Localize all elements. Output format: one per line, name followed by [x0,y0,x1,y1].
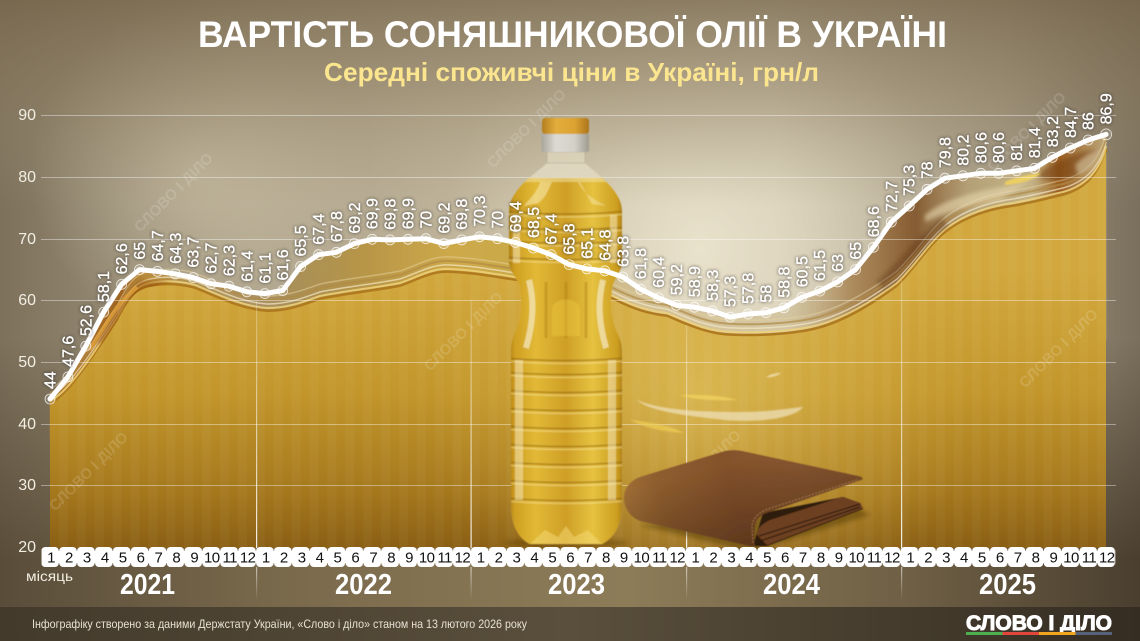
month axis: 5 [763,550,771,566]
data value labels: 69,9 [400,198,418,229]
data value labels: 58,1 [96,271,113,302]
data value labels: 58,3 [705,270,722,301]
month axis: 10 [204,550,220,566]
watermarks: СЛОВО І ДІЛО [421,289,507,375]
data value labels: 80,2 [955,135,972,166]
data value labels: 63,7 [186,236,203,268]
data value labels: 58 [758,285,776,303]
y axis labels: 60 [18,292,36,309]
year labels: 2021 [120,569,175,601]
data value labels: 86,9 [1099,93,1116,124]
watermarks: СЛОВО І ДІЛО [46,429,132,515]
month axis: 6 [996,550,1004,566]
month axis: 12 [1099,550,1115,566]
month axis [42,547,1116,567]
data value labels: 67,4 [311,213,328,245]
month axis: 3 [298,550,306,566]
data value labels: 61,6 [275,249,292,280]
footer band [0,607,1140,641]
month axis: 7 [799,550,807,566]
data value labels: 84,7 [1063,107,1080,138]
title: ВАРТІСТЬ СОНЯШНИКОВОЇ ОЛІЇ В УКРАЇНІ [198,14,947,55]
data value labels: 57,3 [723,276,740,307]
month axis: 9 [835,550,843,566]
data value labels: 60,4 [651,257,668,288]
data value labels: 63 [830,254,847,272]
data value labels: 68,5 [526,207,543,238]
data value labels: 86 [1081,112,1098,130]
data value labels: 61,1 [257,252,274,284]
data value labels: 58,8 [776,267,793,298]
month axis: 1 [262,550,270,566]
data value labels: 69,8 [454,199,471,230]
data value labels: 75,3 [902,165,919,196]
data value labels: 64,7 [150,230,167,261]
data value labels: 44 [42,371,60,389]
month axis: 11 [652,550,667,566]
month axis: 2 [924,550,932,566]
month axis: 3 [513,550,521,566]
data value labels: 69,9 [365,198,382,229]
month axis: 9 [620,550,628,566]
month axis: 8 [817,550,825,566]
month axis: 2 [495,550,503,566]
data value labels: 69,2 [436,202,453,234]
data value labels: 67,4 [544,213,561,245]
y axis labels: 30 [18,477,36,494]
month axis: 1 [47,550,55,566]
data value labels: 65,5 [293,225,310,256]
data value labels: 69,8 [383,199,400,230]
month axis: 4 [316,550,324,566]
data value labels: 80,6 [973,132,990,163]
month axis: 5 [119,550,127,566]
month axis: 1 [906,550,914,566]
month axis caption: місяць [26,569,73,584]
month axis: 8 [1032,550,1040,566]
month axis: 12 [884,550,900,566]
month axis: 3 [727,550,735,566]
data value labels [42,93,1116,389]
month axis: 4 [960,550,968,566]
month axis: 6 [137,550,145,566]
month axis: 10 [848,550,864,566]
subtitle: Середні споживчі ціни в Україні, грн/л [324,57,819,87]
data value labels: 81 [1009,143,1026,161]
month axis: 11 [223,550,237,566]
month axis: 6 [781,550,789,566]
data value labels: 58,9 [687,266,704,297]
data value labels: 62,7 [204,242,221,274]
y axis labels: 90 [18,107,36,124]
data value labels: 70,3 [472,196,489,227]
watermarks: СЛОВО І ДІЛО [659,427,745,513]
month axis: 4 [530,550,538,566]
data value labels: 65,8 [562,223,579,255]
month axis: 1 [692,550,700,566]
month axis: 11 [867,550,882,566]
data value labels: 78 [920,161,937,179]
month axis: 7 [155,550,163,566]
month axis: 12 [240,550,256,566]
data value labels: 65 [132,242,149,260]
month axis: 7 [369,550,377,566]
watermarks: СЛОВО І ДІЛО [1016,306,1102,392]
data value labels: 52,6 [78,305,95,336]
watermarks: СЛОВО І ДІЛО [131,150,217,236]
y axis labels: 20 [18,539,36,556]
month axis: 8 [387,550,395,566]
data value labels: 62,6 [114,243,131,274]
month axis: 9 [190,550,198,566]
y axis labels: 50 [18,354,36,371]
data value labels: 47,6 [60,336,77,367]
data value labels: 81,4 [1027,127,1044,158]
y axis labels: 80 [18,169,36,186]
data value labels: 62,3 [222,245,238,276]
source note: Інфографіку створено за даними Держстату України, «Слово і діло» станом на 13 лютого 2026 року [32,617,527,631]
year labels: 2023 [548,569,605,601]
month axis: 12 [669,550,685,566]
month axis: 6 [351,550,359,566]
month axis: 5 [548,550,556,566]
data value labels: 79,8 [938,137,954,168]
month axis: 7 [584,550,592,566]
data value labels: 60,5 [794,256,811,287]
month axis: 3 [942,550,950,566]
data value labels: 57,8 [741,273,758,304]
month axis: 3 [83,550,91,566]
data value labels: 72,7 [884,181,901,212]
y axis labels: 70 [18,231,36,248]
data value labels: 68,6 [866,206,883,237]
data value labels: 64,8 [597,230,614,261]
year labels: 2022 [335,569,392,601]
year labels [120,569,1036,601]
data value labels: 61,4 [239,251,256,282]
data value labels: 61,5 [812,250,829,281]
month axis: 10 [419,550,435,566]
data value labels: 59,2 [669,264,686,295]
month axis: 1 [477,550,485,566]
data value labels: 63,8 [615,236,632,267]
data value labels: 70 [490,211,507,229]
month axis: 9 [1050,550,1058,566]
grid lines [41,116,1116,486]
logo: СЛОВО І ДІЛО [966,612,1112,635]
icon: oil bottle [504,118,628,548]
y axis labels: 40 [18,416,36,433]
data value labels: 70 [418,211,435,229]
month axis: 11 [437,550,452,566]
month axis: 5 [978,550,986,566]
data point markers [45,129,1112,404]
data value labels: 65 [848,242,865,260]
data value labels: 61,8 [633,248,650,279]
month axis: 11 [1082,550,1096,566]
icon: wallet [624,450,870,552]
data value labels: 67,8 [329,211,346,242]
month axis: 10 [1063,550,1079,566]
month axis: 6 [566,550,574,566]
data value labels: 69,2 [347,202,364,234]
data value labels: 64,3 [168,233,185,264]
month axis: 12 [455,550,470,566]
month axis: 2 [65,550,73,566]
month axis: 10 [634,550,649,566]
watermarks [46,86,1102,515]
month axis: 4 [745,550,753,566]
price line [50,134,1106,399]
data value labels: 69,4 [508,201,525,232]
month axis: 2 [709,550,717,566]
data value labels: 80,6 [991,132,1008,163]
y axis labels [18,107,36,556]
month axis: 5 [334,550,342,566]
oil ripples [630,373,803,433]
year labels: 2024 [763,569,820,601]
watermarks: СЛОВО І ДІЛО [484,86,570,172]
month axis: 9 [405,550,413,566]
panel: oil surface [41,134,1106,548]
year separators [256,280,902,600]
month axis: 8 [172,550,180,566]
month axis: 8 [602,550,610,566]
data value labels: 83,2 [1045,116,1062,147]
watermarks: СЛОВО І ДІЛО [984,89,1070,175]
year labels: 2025 [979,569,1036,601]
month axis: 7 [1014,550,1022,566]
month axis: 4 [101,550,109,566]
data value labels: 65,1 [580,228,596,259]
month axis: 2 [280,550,288,566]
